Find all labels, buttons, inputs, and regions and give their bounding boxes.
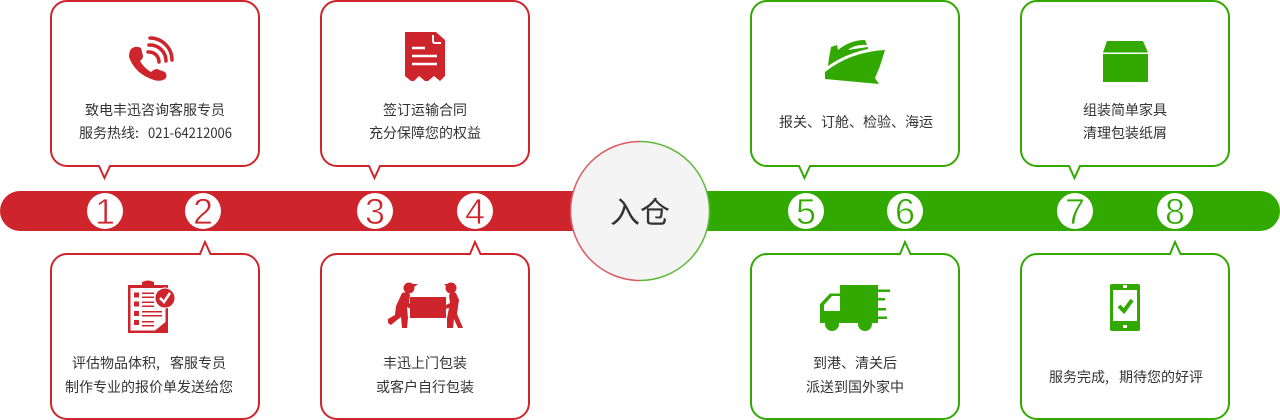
text: panel 3: 充分保障您的权益 — [369, 123, 481, 143]
step marker 5: 5 — [796, 191, 816, 232]
step marker 3 — [357, 191, 393, 232]
timeline bar: red section — [0, 191, 640, 231]
panel 5: customs and shipping — [751, 1, 959, 178]
icon: delivery truck — [820, 285, 890, 331]
text: panel 2: 制作专业的报价单发送给您 — [65, 377, 233, 397]
text: panel 8: 期待您的好评 — [1119, 367, 1203, 387]
text: panel 1: 致电丰迅咨询客服专员 — [85, 100, 225, 120]
text: panel 1: 021-64212006 — [148, 123, 232, 143]
text: panel 7: 清理包装纸屑 — [1083, 123, 1167, 143]
step marker 4: 4 — [465, 191, 485, 232]
panel 7: assemble furniture, clean up — [1021, 1, 1229, 178]
icon: ship — [825, 40, 885, 84]
text: panel 1: 服务热线: — [79, 123, 139, 143]
icon: contract document — [405, 32, 445, 81]
text: panel 2: 评估物品体积, — [72, 353, 160, 373]
text: panel 2: 客服专员 — [170, 353, 226, 373]
step marker 3: 3 — [365, 191, 385, 232]
panel 3: sign contract — [321, 1, 529, 178]
icon: phone with check — [1110, 284, 1140, 331]
step marker 5 — [788, 191, 824, 232]
panel 2: estimate and quotation — [51, 242, 259, 419]
step marker 6 — [887, 191, 923, 232]
text: center label: 入仓 — [610, 188, 670, 232]
step marker 1: 1 — [95, 191, 115, 232]
step marker 7 — [1057, 191, 1093, 232]
text: panel 5: 报关、订舱、检验、海运 — [779, 112, 933, 132]
step marker 8: 8 — [1165, 191, 1185, 232]
text: panel 7: 组装简单家具 — [1083, 100, 1167, 120]
text: panel 3: 签订运输合同 — [383, 100, 467, 120]
timeline bar: green section — [640, 191, 1280, 231]
step marker 6: 6 — [895, 191, 915, 232]
step marker 4 — [457, 191, 493, 232]
text: panel 6: 到港、清关后 — [813, 353, 897, 373]
step marker 2: 2 — [193, 191, 213, 232]
step marker 1 — [87, 191, 123, 232]
step marker 8 — [1157, 191, 1193, 232]
text: panel 6: 派送到国外家中 — [806, 377, 904, 397]
icon: box — [1103, 41, 1148, 82]
center circle: warehousing — [570, 142, 710, 280]
icon: phone — [129, 38, 172, 81]
panel 8: service complete, review — [1021, 242, 1229, 419]
step marker 7: 7 — [1065, 191, 1085, 232]
panel 6: customs clearance and delivery — [751, 242, 959, 419]
panel 4: door-to-door packing — [321, 242, 529, 419]
text: panel 4: 丰迅上门包装 — [383, 353, 467, 373]
step marker 2 — [185, 191, 221, 232]
text: panel 4: 或客户自行包装 — [376, 377, 474, 397]
icon: two movers carrying a box — [388, 282, 463, 328]
text: panel 8: 服务完成, — [1049, 367, 1109, 387]
icon: checklist — [128, 280, 175, 333]
text: panel 1 — [79, 100, 232, 143]
panel 1: contact customer service — [51, 1, 259, 178]
